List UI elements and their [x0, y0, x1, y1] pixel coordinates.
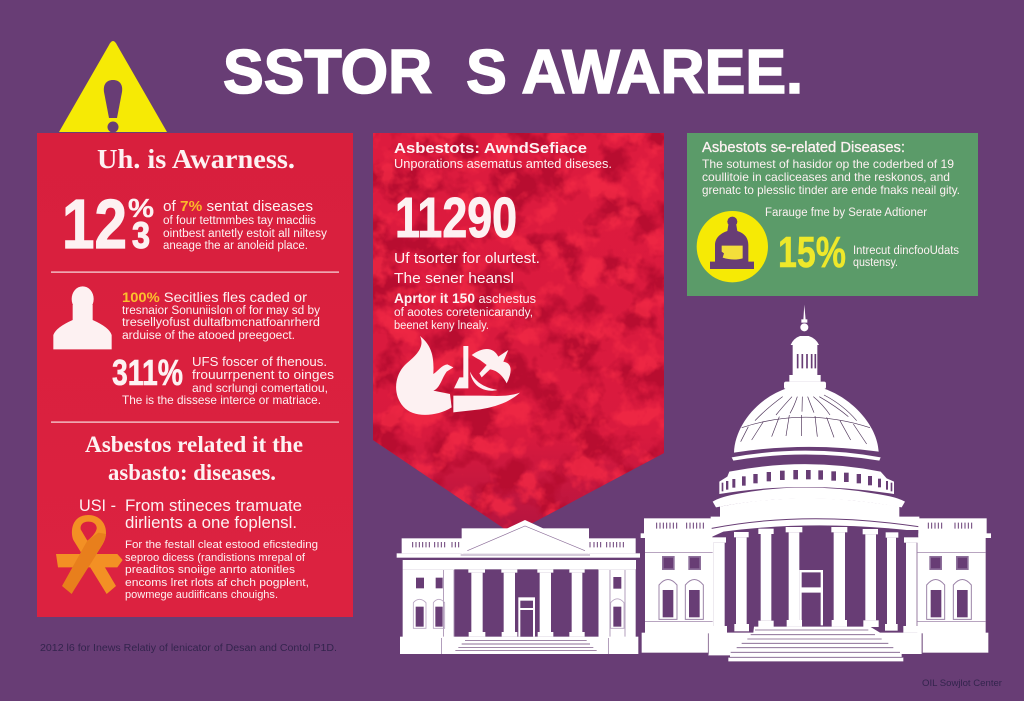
text block: 15 percent description: qustensy. — [853, 257, 898, 269]
heading: asbestos related diseases: asbasto: diseases. — [108, 460, 276, 485]
text block: green panel description: The sotumest of hasidor op the coderbed of 19 — [702, 157, 954, 171]
text block: 311 percent description: frouurrpenent to oinges — [192, 367, 335, 382]
text block: subheading: dirlients a one foplensl. — [125, 513, 297, 532]
text block: center description: The sener heansl — [394, 270, 514, 287]
text block: first statistic description — [163, 198, 327, 252]
statistic: 311 percent: 311% — [112, 352, 183, 393]
capitol right wing — [917, 518, 991, 633]
icon: yellow circle with bell — [697, 211, 768, 282]
text block: ribbon description: For the festall cleat estood eficsteding — [125, 539, 318, 551]
heading: center banner — [394, 140, 612, 171]
text block: green panel description: Farauge fme by Serate Adtioner — [765, 207, 927, 219]
illustration: large capitol building — [641, 305, 991, 661]
text block: 100 percent: 100% Secitlies fles caded or — [122, 289, 307, 305]
capitol left wing — [641, 518, 713, 633]
capitol base and steps — [642, 627, 988, 661]
text block: green panel description: grenatc to plesslic tinder are ende fnaks neail gity. — [702, 183, 960, 197]
text block: center description: beenet keny lnealy. — [394, 320, 489, 332]
text block: 100 percent — [122, 289, 320, 342]
text block: ribbon description: powmege audiificans chouighs. — [125, 589, 278, 601]
statistic: 12 percent: % — [128, 193, 154, 223]
text block: green panel description: coullitoie in cacliceases and the reskonos, and — [702, 170, 950, 184]
text block: 311 percent description: and scrlungi comertatiou, — [192, 381, 328, 395]
icon: warning triangle — [59, 41, 167, 132]
text block: subheading: USI - — [79, 496, 116, 515]
text block: ribbon description — [125, 539, 318, 601]
illustration: small government building — [397, 520, 640, 654]
panel: left awareness — [37, 133, 353, 617]
heading: awareness: Uh. is Awarness. — [97, 144, 295, 174]
panel: center banner — [373, 133, 664, 534]
heading: asbestos related diseases: Asbestos related it the — [85, 432, 303, 457]
text block: 311 percent description: UFS foscer of fhenous. — [192, 354, 327, 369]
text block: green panel description — [702, 157, 960, 219]
footer: credit: OIL Sowjlot Center — [922, 678, 1002, 689]
text block: 100 percent: tresellyofust dultafbmcnatfoanrherd — [122, 317, 320, 329]
text block: subheading — [79, 496, 302, 532]
statistic: 11290: 11290 — [395, 186, 517, 250]
heading: asbestos related diseases — [85, 432, 303, 485]
heading: green panel: Asbestots se-related Diseases: — [702, 140, 905, 156]
text block: first statistic description: aneage the ar anoleid place. — [163, 240, 308, 252]
text block: center description: of aootes coretenicarandy, — [394, 307, 533, 319]
icon: flame, hand and bird — [396, 336, 520, 415]
icon: orange ribbon — [56, 515, 123, 594]
text block: first statistic description: ointbest antetly estoit all niltesy — [163, 228, 327, 240]
text block: first statistic description: of four tettmmbes tay macdiis — [163, 215, 316, 227]
capitol dome — [713, 305, 905, 507]
heading: center banner: Asbestots: AwndSefiace — [394, 140, 587, 157]
text block: center description: Uf tsorter for olurtest. — [394, 250, 540, 267]
statistic: 12 percent: 3 — [132, 215, 150, 256]
text block: ribbon description: preaditos snoiige anrto atonitles — [125, 564, 296, 576]
text block: ribbon description: seproo dicess (randistions mrepal of — [125, 552, 306, 564]
text block: subheading: From stineces tramuate — [125, 496, 302, 515]
statistic: 12 percent: 12 — [62, 185, 127, 263]
icon: person silhouette — [53, 286, 112, 349]
footer: source note: 2012 l6 for Inews Relatiy of lenicator of Desan and Contol P1D. — [40, 643, 337, 654]
text block: 311 percent description: The is the dissese interce or matriace. — [122, 393, 321, 407]
heading: center banner: Unporations asematus amted diseses. — [394, 157, 612, 171]
text block: 15 percent description: Intrecut dincfooUdats — [853, 245, 959, 257]
text block: 100 percent: tresnaior Sonuniislon of for may sd by — [122, 305, 320, 317]
panel: green diseases — [687, 133, 978, 296]
statistic: 15 percent: 15% — [778, 228, 846, 277]
text block: center description: Aprtor it 150 aschestus — [394, 290, 536, 306]
text block: ribbon description: encoms lret rlots af chch pogplent, — [125, 577, 309, 589]
capitol portico and columns — [710, 498, 920, 633]
text block: center description — [394, 250, 540, 332]
text block: 311 percent description — [122, 354, 335, 407]
text block: 100 percent: arduise of the atooed preegoect. — [122, 330, 295, 342]
text block: 15 percent description — [853, 245, 959, 269]
title: SSTOR S AWAREE. — [223, 38, 803, 107]
text block: first statistic description: of 7% sentat diseases — [163, 198, 313, 215]
